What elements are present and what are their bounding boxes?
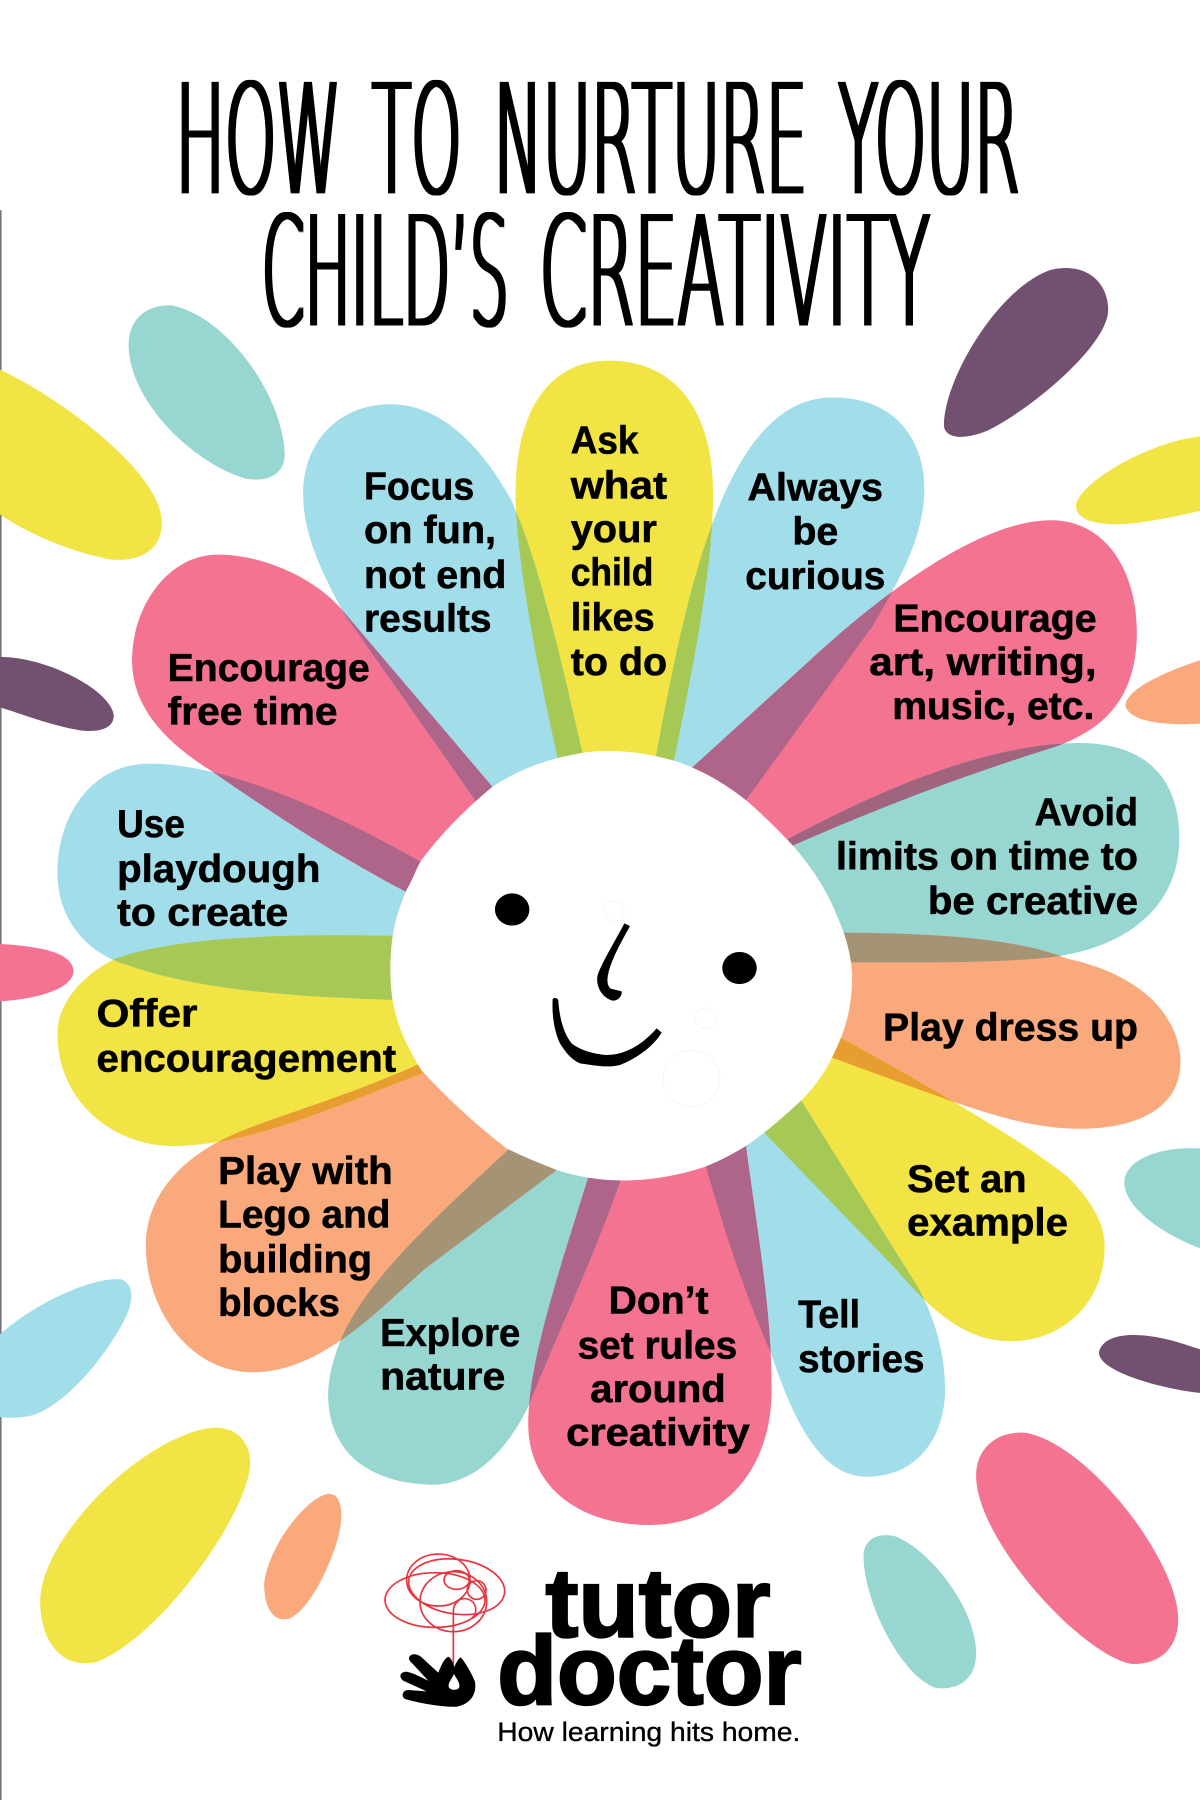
label: offer encouragement <box>96 993 396 1080</box>
label: play with lego and building blocks: blocks <box>218 1282 340 1325</box>
label: encourage art, writing, music: music, etc. <box>892 685 1094 728</box>
label: use playdough to create: to create <box>117 892 288 935</box>
logo wordmark: tutor <box>545 1548 771 1657</box>
label: focus on fun, not end results: not end <box>364 554 506 597</box>
label: avoid limits on time: Avoid <box>1035 792 1138 835</box>
label: explore nature <box>380 1312 520 1398</box>
title: TO <box>372 52 462 229</box>
label: encourage art, writing, music: art, writing, <box>869 641 1097 684</box>
label: encourage art, writing, music <box>869 598 1097 728</box>
petal overlaps <box>57 397 1179 1485</box>
title <box>176 52 1020 361</box>
label: always be curious: Always <box>748 467 883 510</box>
label: always be curious: curious <box>745 555 885 598</box>
label: ask what your child likes to do: Ask <box>571 420 639 463</box>
logo wordmark: doctor <box>497 1616 802 1725</box>
title: CHILD’S <box>262 184 509 361</box>
label: encourage free time: free time <box>168 691 338 734</box>
logo wordmark <box>497 1548 802 1725</box>
label: focus on fun, not end results: on fun, <box>364 509 496 552</box>
label: set an example: Set an <box>907 1158 1027 1201</box>
label: focus on fun, not end results <box>364 466 506 641</box>
flower centre face <box>390 751 852 1180</box>
label: encourage art, writing, music: Encourage <box>893 598 1097 641</box>
flower petals <box>57 361 1180 1525</box>
label: play with lego and building blocks <box>218 1150 393 1325</box>
label: offer encouragement: Offer <box>96 993 198 1036</box>
label: avoid limits on time <box>836 792 1138 923</box>
left edge rule <box>0 210 2 1800</box>
label: ask what your child likes to do: what <box>570 464 667 507</box>
label: explore nature: nature <box>380 1355 505 1398</box>
label: always be curious: be <box>792 510 838 553</box>
label: tell stories: stories <box>798 1338 924 1381</box>
logo: tutor doctor <box>385 1548 802 1747</box>
label: use playdough to create: playdough <box>117 848 320 891</box>
label: ask what your child likes to do <box>570 420 667 684</box>
title: HOW <box>176 52 341 229</box>
logo tagline: How learning hits home. <box>497 1717 800 1747</box>
label: play with lego and building blocks: Play with <box>218 1150 393 1193</box>
label: set an example <box>907 1158 1068 1245</box>
label: avoid limits on time: be creative <box>928 880 1138 923</box>
label: don't set rules around creativity: set rules <box>578 1324 737 1367</box>
label: always be curious <box>745 467 885 598</box>
label: ask what your child likes to do: to do <box>571 641 667 684</box>
label: ask what your child likes to do: your <box>571 508 657 551</box>
label: set an example: example <box>907 1202 1068 1245</box>
label: don't set rules around creativity: Don’t <box>609 1280 709 1323</box>
label: tell stories: Tell <box>798 1293 860 1336</box>
label: focus on fun, not end results: Focus <box>364 466 474 509</box>
label: ask what your child likes to do: child <box>571 552 653 595</box>
label: play with lego and building blocks: Lego and <box>218 1194 390 1237</box>
label: tell stories <box>798 1293 924 1381</box>
label: don't set rules around creativity: creativity <box>566 1412 750 1455</box>
icon: scribble brain and hand <box>385 1553 508 1707</box>
label: offer encouragement: encouragement <box>96 1037 396 1080</box>
label: encourage free time: Encourage <box>168 647 370 690</box>
label: focus on fun, not end results: results <box>364 598 491 641</box>
label: don't set rules around creativity <box>566 1280 750 1455</box>
label: use playdough to create: Use <box>117 803 185 846</box>
label: ask what your child likes to do: likes <box>571 596 655 639</box>
decorative background blobs <box>0 268 1200 1688</box>
title: NURTURE <box>494 52 807 229</box>
label: encourage free time <box>168 647 370 734</box>
label: play with lego and building blocks: building <box>218 1238 372 1281</box>
label: use playdough to create <box>117 803 320 935</box>
label: explore nature: Explore <box>380 1312 520 1355</box>
label: avoid limits on time: limits on time to <box>836 835 1138 878</box>
label: play dress up: Play dress up <box>883 1006 1138 1049</box>
label: don't set rules around creativity: around <box>590 1368 726 1411</box>
